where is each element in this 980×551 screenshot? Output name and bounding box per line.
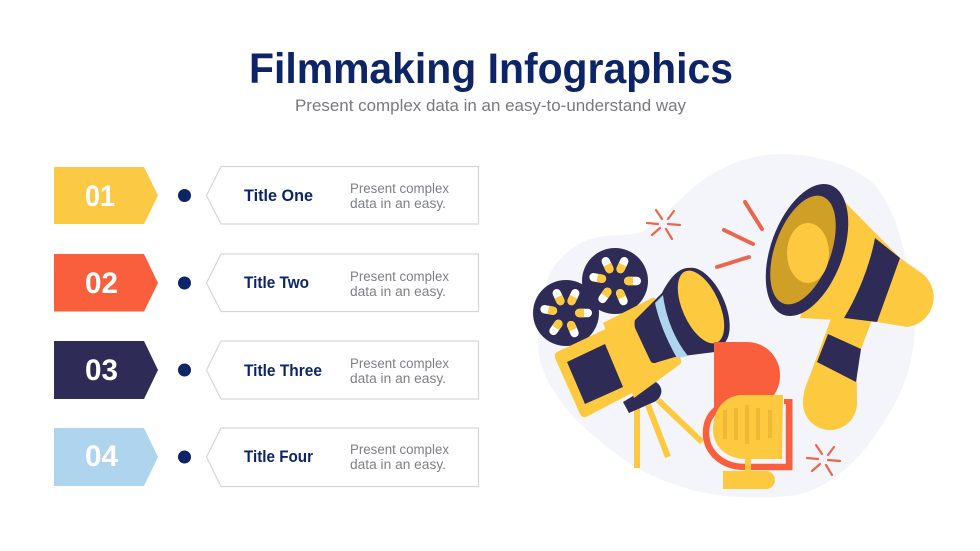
card 2: Title Two [244, 273, 309, 292]
card 1: Present complex [350, 181, 449, 196]
card 1 [206, 166, 478, 224]
connector dot 4 [178, 450, 191, 464]
title: Filmmaking Infographics [249, 45, 733, 93]
card 4: Title Four [244, 447, 313, 466]
number tag 03 [54, 341, 158, 399]
subtitle: Present complex data in an easy-to-understand way [295, 96, 686, 115]
camera screen [567, 344, 623, 404]
card 2: Present complex [350, 269, 449, 284]
tripod [637, 400, 702, 468]
film reel front [533, 280, 599, 346]
number tag 02: 02 [85, 267, 118, 300]
megaphone cone [800, 195, 934, 327]
microphone [706, 395, 792, 489]
camera mount [623, 382, 661, 413]
card 4 [206, 428, 478, 486]
card 1: data in an easy. [350, 196, 446, 211]
mic stem [745, 459, 751, 473]
number tag 04 [54, 428, 158, 486]
card 3 [206, 341, 478, 399]
sparkle top [647, 210, 680, 239]
mic grille lines [725, 405, 770, 444]
connector dot 2 [178, 276, 191, 290]
mic head [713, 395, 783, 459]
card 4: data in an easy. [350, 457, 446, 472]
row 3 [54, 341, 478, 399]
card 2 [206, 254, 478, 312]
card 3: Title Three [244, 361, 322, 380]
row 1 [54, 166, 478, 224]
camera lens [634, 268, 716, 363]
card 1: Title One [244, 186, 313, 205]
number tag 04: 04 [85, 440, 118, 473]
card 4: Present complex [350, 442, 449, 457]
number tag 02 [54, 254, 158, 312]
mic cradle [706, 402, 789, 467]
number tag 03: 03 [85, 354, 118, 387]
row 4 [54, 428, 478, 486]
megaphone mouth [750, 173, 864, 327]
illustration: filmmaking scene [533, 154, 934, 498]
sound rays [717, 202, 762, 267]
number tag 01 [54, 167, 158, 224]
connector dot 3 [178, 364, 191, 376]
number tag 01: 01 [85, 180, 115, 213]
sparkle bottom [807, 445, 840, 475]
film reel back [582, 248, 648, 314]
connector dot 1 [178, 189, 191, 202]
camera side plate [555, 326, 636, 417]
director chair orange back [714, 342, 780, 412]
camera body [603, 298, 681, 398]
background blob [538, 154, 915, 498]
megaphone [750, 173, 934, 430]
megaphone handle [803, 316, 872, 430]
row 2 [54, 254, 478, 312]
card 3: Present complex [350, 356, 449, 371]
mic base [723, 471, 775, 489]
camera [555, 260, 740, 417]
card 3: data in an easy. [350, 371, 446, 386]
card 2: data in an easy. [350, 284, 446, 299]
